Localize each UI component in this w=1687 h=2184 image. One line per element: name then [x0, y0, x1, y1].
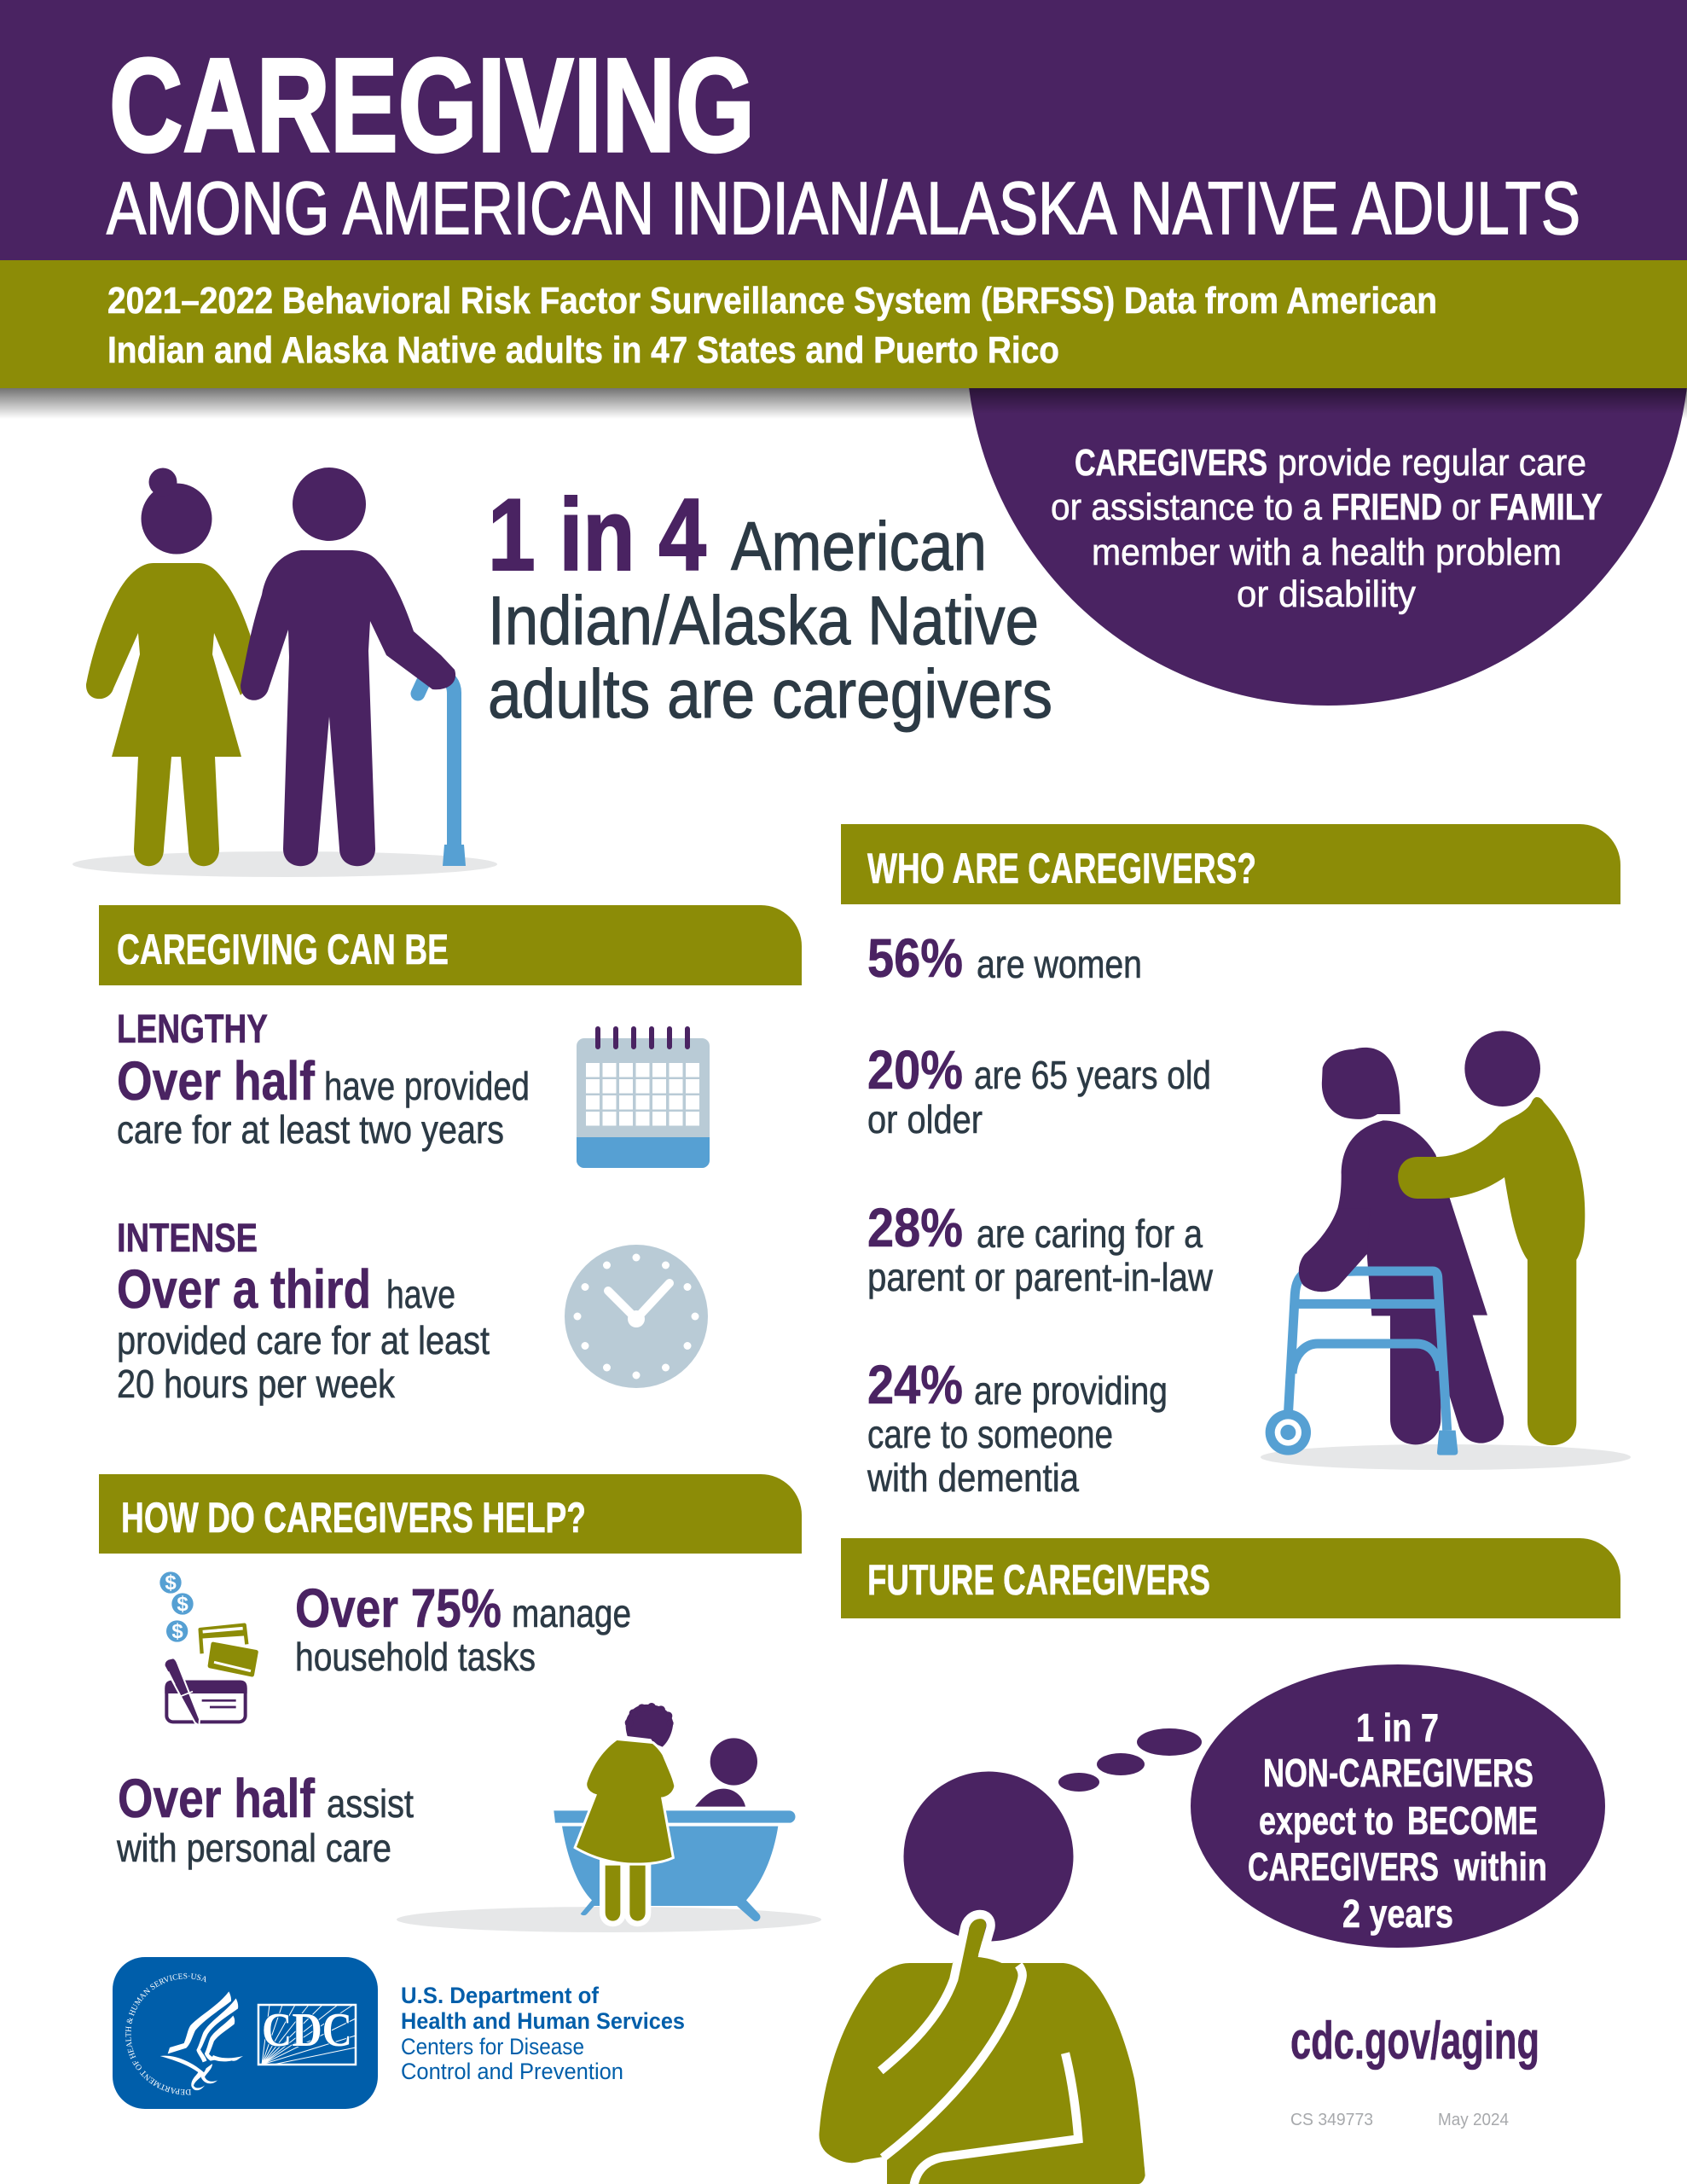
headline statistic: Indian/Alaska Native: [488, 583, 1039, 659]
stat: women: [867, 927, 1142, 989]
stat: parent: 28%: [867, 1197, 963, 1258]
lengthy stat: have provided: [324, 1064, 530, 1108]
thought text: [1248, 1705, 1547, 1936]
definition text: FAMILY: [1489, 486, 1603, 528]
thought text: BECOME: [1407, 1798, 1538, 1843]
dollar signs: [165, 1571, 188, 1643]
agency names: [401, 1983, 685, 2084]
stat: women: 56%: [867, 927, 963, 989]
heading: WHO ARE CAREGIVERS?: [867, 845, 1256, 892]
website link: cdc.gov/aging: [1290, 2012, 1539, 2071]
manage household tasks stat: manage: [512, 1591, 631, 1635]
publication date: May 2024: [1438, 2111, 1509, 2129]
heading bar: [841, 1538, 1620, 1618]
definition text: member with a health problem: [1092, 531, 1562, 573]
personal care stat: [116, 1768, 414, 1870]
personal care stat: assist: [327, 1781, 414, 1826]
thought bubble: [1058, 1664, 1605, 1948]
dollar signs: $: [165, 1571, 177, 1594]
agency names: U.S. Department of: [401, 1983, 600, 2008]
stat: women: are women: [977, 942, 1142, 986]
heading: HOW DO CAREGIVERS HELP?: [121, 1494, 586, 1542]
thought text: NON-CAREGIVERS: [1263, 1751, 1533, 1795]
icon: clock: [565, 1245, 708, 1388]
stat: parent: [867, 1197, 1214, 1299]
stat: age: are 65 years old: [974, 1053, 1211, 1097]
stat: dementia: 24%: [867, 1354, 963, 1415]
personal care stat: Over half: [118, 1768, 316, 1829]
man figure: [241, 550, 455, 866]
stat: dementia: care to someone: [867, 1412, 1113, 1456]
definition text: [1051, 442, 1603, 615]
icon: older couple with cane: [72, 468, 497, 877]
heading: CAREGIVING CAN BE: [117, 926, 449, 973]
heading bar: [841, 824, 1620, 904]
thought text: expect to: [1259, 1798, 1394, 1843]
panel: how do caregivers help: [99, 1474, 821, 1932]
stat: parent: parent or parent-in-law: [867, 1255, 1214, 1299]
logo: HHS and CDC: [113, 1957, 685, 2109]
definition text: or disability: [1237, 573, 1416, 615]
header band: [0, 0, 1687, 261]
hand and finger: [924, 1917, 1017, 2042]
thought text: within: [1453, 1844, 1547, 1889]
definition text: provide regular care: [1278, 442, 1586, 484]
stat: age: 20%: [867, 1039, 963, 1101]
heading: FUTURE CAREGIVERS: [867, 1556, 1210, 1604]
person with walker: [1299, 1048, 1504, 1444]
agency names: Centers for Disease: [401, 2034, 584, 2059]
heading bar: [99, 905, 802, 985]
data source band: [0, 260, 1687, 419]
lengthy stat: [117, 1006, 530, 1152]
intense stat: 20 hours per week: [117, 1362, 396, 1406]
manage household tasks stat: Over 75%: [295, 1577, 501, 1639]
definition text: or assistance to a: [1051, 486, 1322, 528]
walker: [1289, 1271, 1447, 1431]
intense stat: INTENSE: [117, 1215, 258, 1260]
icon: bathing assistance: [397, 1703, 821, 1932]
panel: caregiving can be: [99, 905, 802, 1406]
definition circle: [969, 388, 1687, 706]
thought text: CAREGIVERS: [1248, 1844, 1439, 1889]
CDC mark: CDC: [262, 2004, 352, 2057]
intense stat: provided care for at least: [117, 1318, 490, 1362]
dollar signs: $: [171, 1620, 183, 1643]
panel: who are caregivers: [841, 824, 1631, 1500]
stat: dementia: are providing: [974, 1368, 1168, 1413]
icon: bills and cards: [159, 1571, 258, 1726]
stat: parent: are caring for a: [977, 1211, 1203, 1256]
stat: dementia: with dementia: [867, 1455, 1079, 1500]
stat: age: [867, 1039, 1211, 1141]
helper: [1398, 1097, 1585, 1445]
intense stat: have: [386, 1272, 455, 1316]
definition text: FRIEND: [1331, 486, 1442, 528]
woman figure: [86, 563, 260, 866]
hand on walker: [1299, 1209, 1371, 1292]
HHS seal ring text: DEPARTMENT OF HEALTH & HUMAN SERVICES·USA: [125, 1972, 206, 2095]
title: CAREGIVING: [109, 32, 755, 180]
headline statistic: [488, 478, 1052, 733]
dollar signs: $: [177, 1593, 188, 1616]
agency names: Control and Prevention: [401, 2059, 623, 2084]
data source text: Indian and Alaska Native adults in 47 States and Puerto Rico: [107, 329, 1059, 371]
lengthy stat: LENGTHY: [117, 1006, 268, 1051]
personal care stat: with personal care: [116, 1826, 391, 1870]
publication id: CS 349773: [1290, 2111, 1373, 2129]
definition text: CAREGIVERS: [1075, 442, 1267, 484]
icon: thinking person: [819, 1771, 1145, 2184]
data source text: 2021–2022 Behavioral Risk Factor Surveillance System (BRFSS) Data from American: [107, 280, 1437, 322]
icon: walker illustration: [1261, 1031, 1631, 1470]
thought text: 2 years: [1342, 1891, 1453, 1936]
thought text: 1 in 7: [1356, 1705, 1439, 1750]
panel: future caregivers: [819, 1538, 1620, 2184]
intense stat: [117, 1215, 490, 1406]
stat: dementia: [867, 1354, 1168, 1500]
intense stat: Over a third: [117, 1258, 371, 1320]
headline statistic: 1 in 4: [488, 478, 706, 592]
lengthy stat: Over half: [117, 1050, 316, 1112]
cane: [418, 674, 466, 866]
headline statistic: American: [731, 508, 987, 585]
headline statistic: adults are caregivers: [488, 656, 1052, 733]
caregiver at tub: [577, 1703, 674, 1924]
HHS eagle: [160, 1991, 243, 2090]
data source text: [107, 280, 1437, 371]
stat: age: or older: [867, 1097, 983, 1141]
icon: calendar: [577, 1029, 710, 1168]
manage household tasks stat: household tasks: [295, 1635, 536, 1679]
lengthy stat: care for at least two years: [117, 1107, 504, 1152]
definition text: or: [1452, 486, 1481, 528]
manage household tasks stat: [295, 1577, 631, 1679]
agency names: Health and Human Services: [401, 2008, 685, 2034]
heading bar: [99, 1474, 802, 1554]
